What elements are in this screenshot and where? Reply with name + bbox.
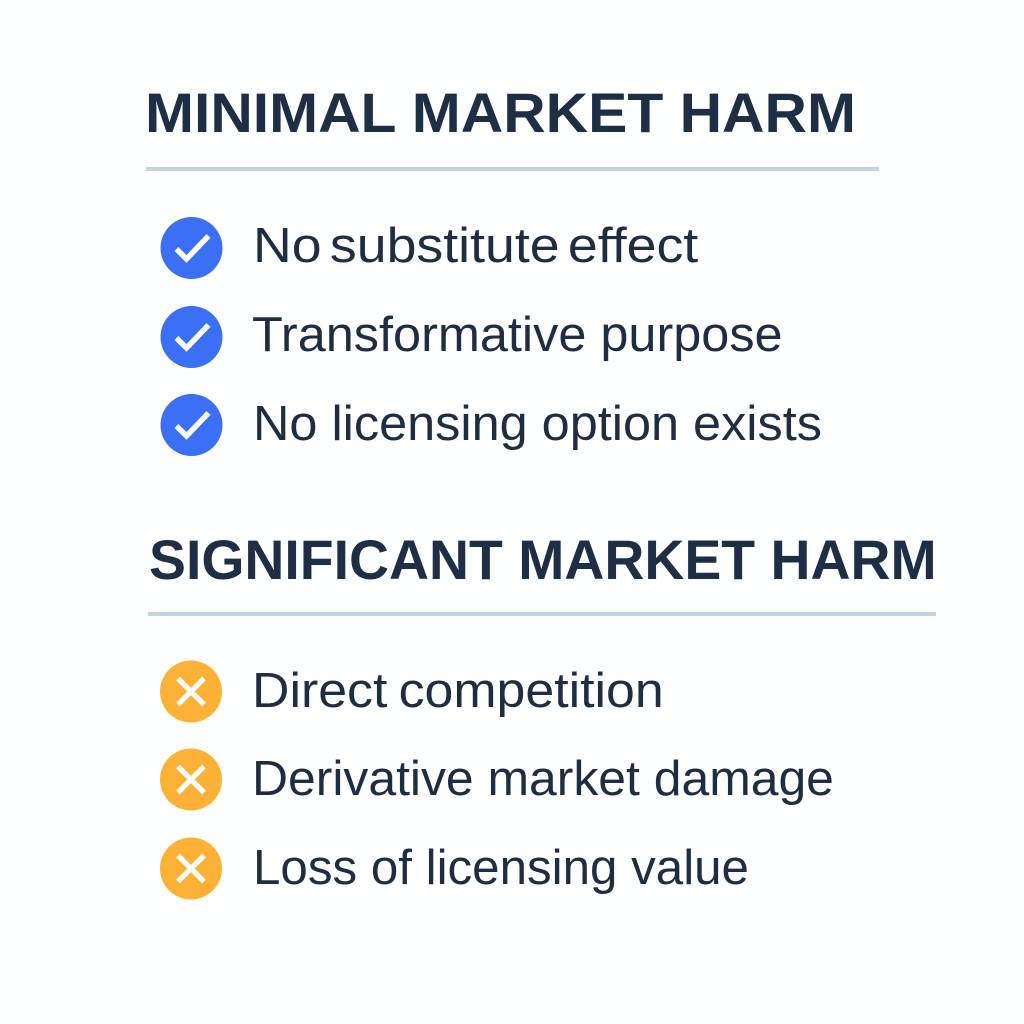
icon: check 3 bbox=[160, 394, 222, 456]
text: no substitute effect: No substitute effect bbox=[253, 219, 698, 273]
text: no licensing option exists: No licensing option exists bbox=[253, 397, 822, 451]
text: derivative market damage: Derivative market damage bbox=[252, 752, 834, 806]
icon: cross 3 bbox=[160, 838, 222, 900]
text: transformative purpose: Transformative purpose bbox=[252, 308, 783, 362]
icon: check 2 bbox=[160, 306, 222, 368]
heading: significant market harm: SIGNIFICANT MARKET HARM bbox=[149, 528, 937, 591]
icon: cross 2 bbox=[160, 748, 222, 810]
text: direct competition: Direct competition bbox=[252, 664, 664, 718]
icon: cross 1 bbox=[160, 660, 222, 722]
icon: check 1 bbox=[160, 217, 222, 279]
text: loss of licensing value: Loss of licensing value bbox=[253, 841, 749, 895]
heading: minimal market harm: MINIMAL MARKET HARM bbox=[145, 81, 856, 144]
